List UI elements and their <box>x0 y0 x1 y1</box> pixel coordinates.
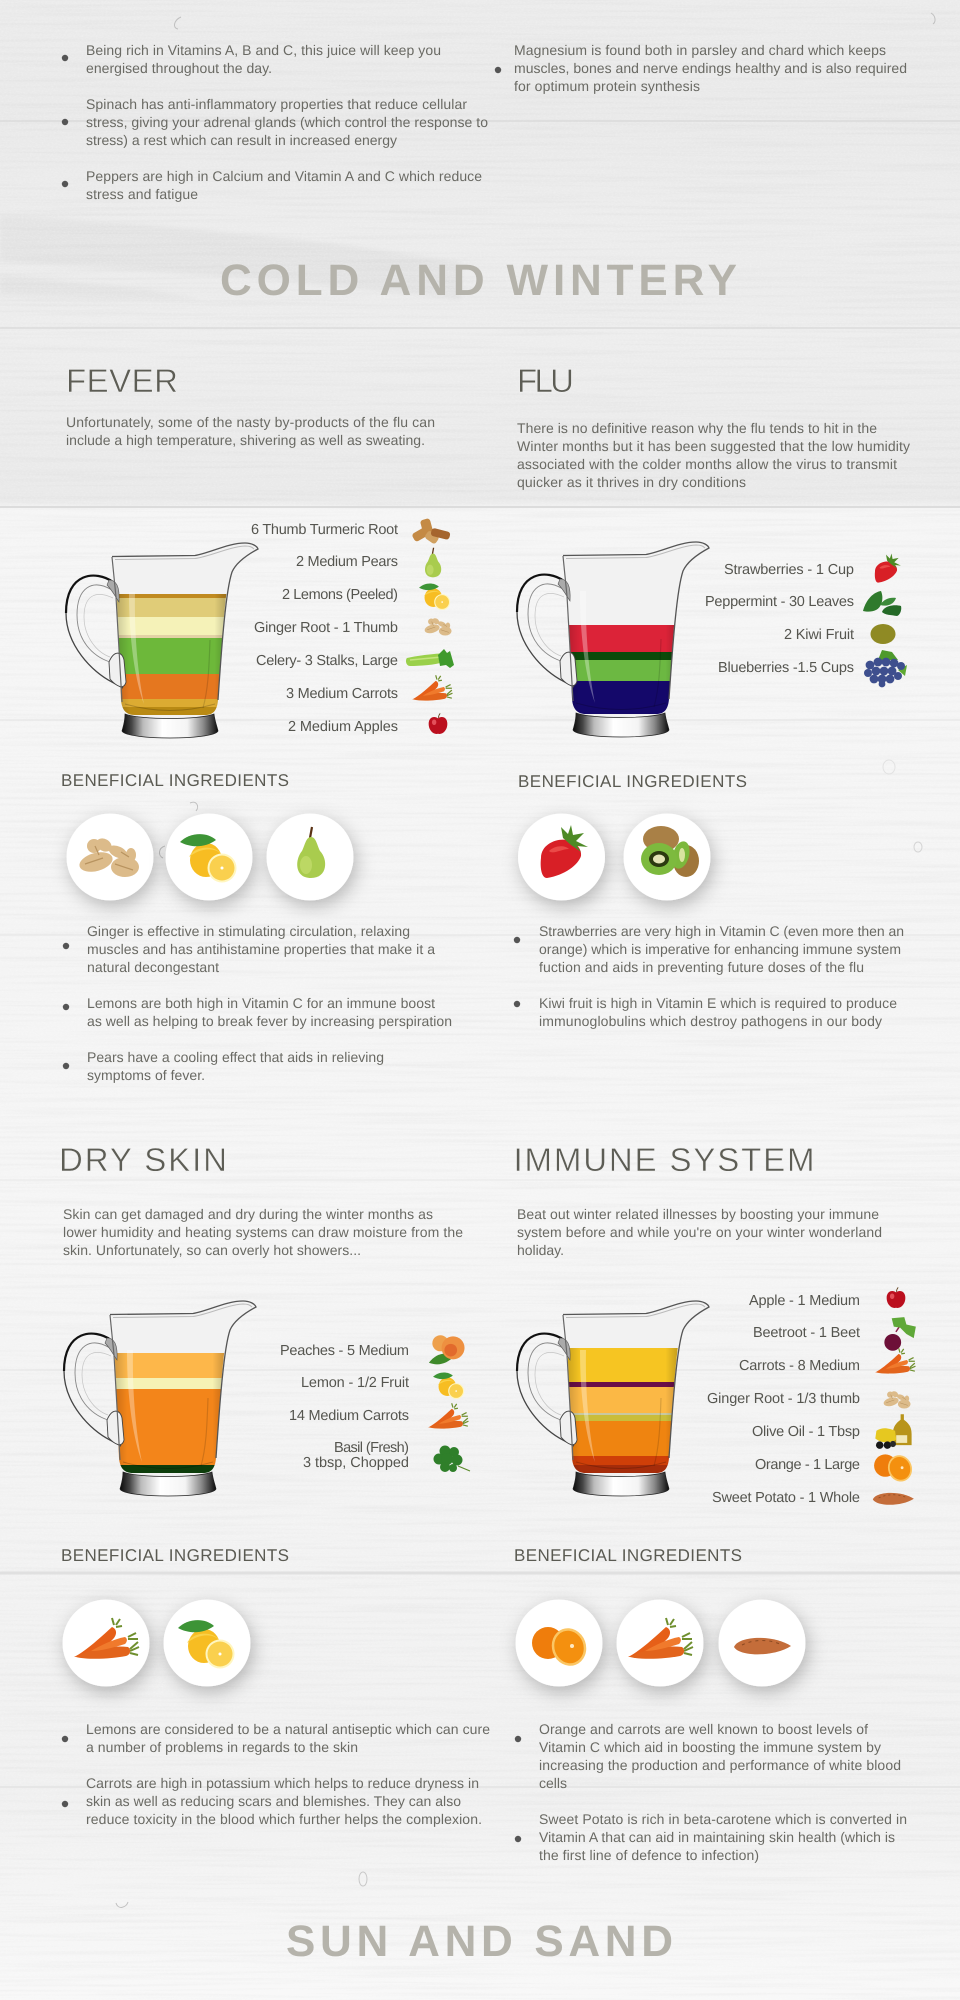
ingredient: ginger root: Ginger Root - 1/3 thumb <box>707 1391 860 1407</box>
ingredient: beetroot: Beetroot - 1 Beet <box>753 1325 860 1341</box>
bullet: peppers: Peppers are high in Calcium and Vitamin A and C which reduce <box>86 168 482 184</box>
bullet: carrots: reduce toxicity in the blood which further helps the complexion. <box>86 1811 482 1827</box>
panel: dry skin <box>59 1141 490 1827</box>
intro text: dry skin: Skin can get damaged and dry during the winter months as <box>63 1206 433 1222</box>
subheading: beneficial ingredients: BENEFICIAL INGREDIENTS <box>514 1546 742 1565</box>
ingredient: beetroot <box>753 1317 916 1351</box>
intro text: flu <box>517 420 910 490</box>
bullet: carrots: skin as well as reducing scars and blemishes. They can also <box>86 1793 461 1809</box>
bullet: spinach: stress) a rest which can result in increased energy <box>86 132 397 148</box>
bullet: vitamins <box>62 42 441 76</box>
bullet: orange and carrots <box>515 1721 901 1791</box>
intro text: fever <box>66 414 435 448</box>
bullet: vitamins: Being rich in Vitamins A, B and C, this juice will keep you <box>86 42 441 58</box>
icon circle: sweet potato <box>718 1600 806 1686</box>
bullet: magnesium <box>495 42 907 94</box>
ingredient: peaches <box>280 1335 465 1364</box>
title: cold and wintery: COLD AND WINTERY <box>220 256 737 305</box>
icon circle: lemon <box>164 1600 250 1686</box>
intro text: dry skin: lower humidity and heating systems can draw moisture from the <box>63 1224 463 1240</box>
intro text: dry skin <box>63 1206 463 1258</box>
icon circle: ginger <box>66 814 154 900</box>
bullet: lemons <box>63 995 452 1029</box>
icon circle: orange <box>516 1600 602 1686</box>
intro text: flu: associated with the colder months allow the virus to transmit <box>517 456 897 472</box>
icon circle: pear <box>266 814 354 900</box>
ingredient: ginger root <box>707 1390 910 1409</box>
ingredient: apples <box>288 713 447 735</box>
bullet: peppers: stress and fatigue <box>86 186 198 202</box>
bullet: lemons: a number of problems in regards to the skin <box>86 1739 358 1755</box>
bullet: strawberries: Strawberries are very high in Vitamin C (even more then an <box>539 923 904 939</box>
ingredient: carrots <box>286 675 452 702</box>
ingredient: basil <box>303 1440 470 1472</box>
bullet: pears: symptoms of fever. <box>87 1067 205 1083</box>
heading: dry skin: DRY SKIN <box>59 1141 227 1178</box>
bullet: spinach <box>62 96 488 148</box>
ingredient: orange <box>755 1452 916 1485</box>
bullet: sweet potato: Vitamin A that can aid in maintaining skin health (which is <box>539 1829 895 1845</box>
ingredient: olive oil: Olive Oil - 1 Tbsp <box>752 1424 860 1440</box>
ingredient: peaches: Peaches - 5 Medium <box>280 1343 409 1359</box>
bullet: strawberries: orange) which is imperative for enhancing immune system <box>539 941 901 957</box>
ingredient: pears <box>296 548 441 577</box>
heading: fever: FEVER <box>66 362 178 399</box>
intro text: flu: There is no definitive reason why the flu tends to hit in the <box>517 420 877 436</box>
bullet: magnesium: muscles, bones and nerve endings healthy and is also required <box>514 60 907 76</box>
bullet: kiwi: immunoglobulins which destroy pathogens in our body <box>539 1013 882 1029</box>
bullet: peppers <box>62 168 482 202</box>
bullet: kiwi: Kiwi fruit is high in Vitamin E which is required to produce <box>539 995 897 1011</box>
ingredient: olive oil <box>752 1414 912 1449</box>
bullet: lemons: Lemons are considered to be a natural antiseptic which can cure <box>86 1721 490 1737</box>
ingredient: lemons: 2 Lemons (Peeled) <box>282 587 398 603</box>
intro text: immune system: system before and while you're on your winter wonderland <box>517 1224 882 1240</box>
intro text: fever: include a high temperature, shivering as well as sweating. <box>66 432 425 448</box>
ingredient: lemon <box>301 1372 464 1399</box>
icon circle: kiwi <box>624 814 710 900</box>
ingredient: apples: 2 Medium Apples <box>288 719 398 735</box>
bullet: orange and carrots: Orange and carrots are well known to boost levels of <box>539 1721 868 1737</box>
intro text: flu: Winter months but it has been suggested that the low humidity <box>517 438 910 454</box>
panel: previous section notes <box>62 42 907 202</box>
ingredient: basil: Basil (Fresh) <box>334 1440 409 1456</box>
ingredient: lemons <box>282 583 450 610</box>
ingredient: pears: 2 Medium Pears <box>296 554 398 570</box>
bullet: carrots <box>62 1775 482 1827</box>
ingredient: turmeric: 6 Thumb Turmeric Root <box>251 522 398 538</box>
intro text: immune system <box>517 1206 882 1258</box>
ingredient: turmeric <box>251 518 451 545</box>
bullet: magnesium: Magnesium is found both in parsley and chard which keeps <box>514 42 886 58</box>
panel: fever <box>61 362 454 1083</box>
icon circle: carrots <box>616 1600 704 1686</box>
ingredient: apple <box>749 1287 905 1309</box>
icon circle: carrots <box>62 1600 150 1686</box>
bullet: ginger: muscles and has antihistamine properties that make it a <box>87 941 435 957</box>
ingredient: strawberries: Strawberries - 1 Cup <box>724 562 854 578</box>
ingredient: sweet potato: Sweet Potato - 1 Whole <box>712 1490 860 1506</box>
icon circle: strawberry <box>518 814 605 900</box>
bullet: spinach: stress, giving your adrenal glands (which control the response to <box>86 114 488 130</box>
ingredient: strawberries <box>724 554 901 583</box>
heading: flu: FLU <box>517 362 574 399</box>
ingredient: peppermint <box>705 591 901 616</box>
ingredient: orange: Orange - 1 Large <box>755 1457 860 1473</box>
ingredient: kiwi <box>784 624 896 644</box>
ingredient: celery <box>256 649 454 669</box>
ingredient: apple: Apple - 1 Medium <box>749 1293 860 1309</box>
panel: flu <box>514 362 910 1029</box>
intro text: immune system: Beat out winter related illnesses by boosting your immune <box>517 1206 879 1222</box>
ingredient: blueberries <box>718 650 907 687</box>
ingredient: lemon: Lemon - 1/2 Fruit <box>301 1375 409 1391</box>
bullet: pears <box>63 1049 384 1083</box>
intro text: fever: Unfortunately, some of the nasty by-products of the flu can <box>66 414 435 430</box>
ingredient: carrots: 3 Medium Carrots <box>286 686 398 702</box>
bullet: carrots: Carrots are high in potassium which helps to reduce dryness in <box>86 1775 479 1791</box>
ingredient: ginger: Ginger Root - 1 Thumb <box>254 620 398 636</box>
bullet: lemons: as well as helping to break fever by increasing perspiration <box>87 1013 452 1029</box>
bullet: orange and carrots: increasing the production and performance of white blood <box>539 1757 901 1773</box>
ingredient: carrots <box>739 1348 915 1374</box>
ingredient: blueberries: Blueberries -1.5 Cups <box>718 660 854 676</box>
juice jug: flu <box>517 542 709 737</box>
heading: immune system: IMMUNE SYSTEM <box>514 1141 814 1178</box>
bullet: lemons <box>62 1721 490 1755</box>
bullet: magnesium: for optimum protein synthesis <box>514 78 700 94</box>
bullet: spinach: Spinach has anti-inflammatory properties that reduce cellular <box>86 96 467 112</box>
juice jug: dry skin <box>64 1301 256 1496</box>
bullet: kiwi <box>514 995 897 1029</box>
juice jug: immune system <box>517 1301 709 1496</box>
juice jug: fever <box>66 543 258 738</box>
bullet: strawberries: fuction and aids in preventing future doses of the flu <box>539 959 864 975</box>
bullet: vitamins: energised throughout the day. <box>86 60 272 76</box>
ingredient: carrots: 14 Medium Carrots <box>289 1408 409 1424</box>
ingredient: basil: 3 tbsp, Chopped <box>303 1455 409 1471</box>
bullet: orange and carrots: cells <box>539 1775 567 1791</box>
ingredient: celery: Celery- 3 Stalks, Large <box>256 653 398 669</box>
icon circle: lemon <box>166 814 252 900</box>
bullet: ginger <box>63 923 435 975</box>
subheading: beneficial ingredients: BENEFICIAL INGREDIENTS <box>61 771 289 790</box>
title: sun and sand: SUN AND SAND <box>286 1917 673 1966</box>
bullet: strawberries <box>514 923 904 975</box>
bullet: pears: Pears have a cooling effect that aids in relieving <box>87 1049 384 1065</box>
subheading: beneficial ingredients: BENEFICIAL INGREDIENTS <box>61 1546 289 1565</box>
ingredient: kiwi: 2 Kiwi Fruit <box>784 627 854 643</box>
ingredient: carrots <box>289 1403 468 1429</box>
intro text: immune system: holiday. <box>517 1242 564 1258</box>
ingredient: ginger <box>254 617 452 636</box>
bullet: orange and carrots: Vitamin C which aid in boosting the immune system by <box>539 1739 881 1755</box>
bullet: ginger: Ginger is effective in stimulating circulation, relaxing <box>87 923 410 939</box>
bullet: ginger: natural decongestant <box>87 959 219 975</box>
ingredient: carrots: Carrots - 8 Medium <box>739 1358 860 1374</box>
intro text: flu: quicker as it thrives in dry conditions <box>517 474 746 490</box>
bullet: lemons: Lemons are both high in Vitamin C for an immune boost <box>87 995 435 1011</box>
bullet: sweet potato: the first line of defence to infection) <box>539 1847 759 1863</box>
ingredient: peppermint: Peppermint - 30 Leaves <box>705 594 854 610</box>
subheading: beneficial ingredients: BENEFICIAL INGREDIENTS <box>518 772 747 791</box>
bullet: sweet potato: Sweet Potato is rich in beta-carotene which is converted in <box>539 1811 907 1827</box>
intro text: dry skin: skin. Unfortunately, so can overly hot showers... <box>63 1242 361 1258</box>
bullet: sweet potato <box>515 1811 907 1863</box>
panel: immune system <box>514 1141 916 1863</box>
